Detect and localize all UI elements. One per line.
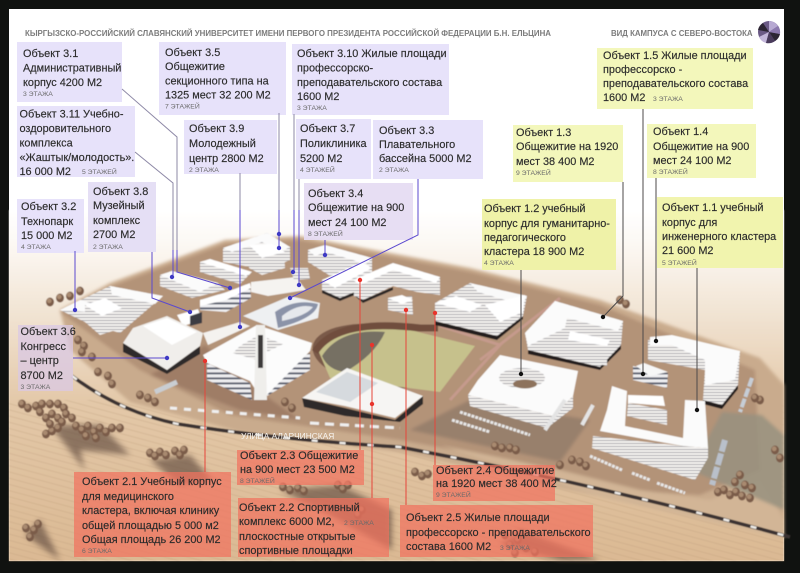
label: object 3.1 bbox=[23, 48, 121, 98]
label: object 1.5 bbox=[603, 50, 749, 104]
stadium bbox=[308, 316, 456, 396]
leader lines: group 3 purple bbox=[73, 179, 418, 358]
label: object 2.4: Объект 2.4 Общежитие bbox=[436, 465, 554, 477]
label: object 1.2 bbox=[484, 203, 610, 267]
label: object 1.2: корпус для гуманитарно- bbox=[484, 218, 610, 230]
label: object 1.1 bbox=[662, 202, 777, 267]
label: object 3.9: 2 ЭТАЖА bbox=[189, 167, 219, 174]
label: object 3.2: Технопарк bbox=[21, 216, 73, 228]
label: object 1.5: профессорско - bbox=[603, 64, 683, 76]
label: object 3.6 bbox=[20, 326, 76, 391]
label: object 3.10 bbox=[297, 48, 447, 112]
label: object 2.3: на 900 мест 23 500 М2 bbox=[240, 464, 355, 476]
label: object 1.1: инженерного кластера bbox=[662, 231, 777, 243]
label: object 3.6: Объект 3.6 bbox=[20, 326, 76, 338]
label: object 3.6: 3 ЭТАЖА bbox=[20, 384, 51, 391]
label: object 3.3: 2 ЭТАЖА bbox=[379, 167, 409, 174]
label: object 2.4 bbox=[436, 465, 557, 499]
label: object 1.5: 1600 М2 bbox=[603, 92, 645, 104]
label: object 3.11: 16 000 М2 bbox=[20, 166, 71, 178]
label: object 2.1: Общая площадь 26 200 М2 bbox=[82, 534, 221, 546]
label: object 1.3 bbox=[516, 127, 618, 177]
black anchor dots bbox=[519, 315, 699, 412]
label: object 3.11: комплекса bbox=[20, 138, 74, 150]
label: object 3.3 bbox=[379, 125, 472, 174]
label: object 3.10: 3 ЭТАЖА bbox=[297, 105, 327, 112]
label: object 2.3: Объект 2.3 Общежитие bbox=[240, 450, 358, 462]
view caption: ВИД КАМПУСА С СЕВЕРО-ВОСТОКА bbox=[611, 29, 753, 38]
label: object 3.7: Объект 3.7 bbox=[300, 123, 355, 135]
label: object 2.5: Объект 2.5 Жилые площади bbox=[406, 512, 550, 524]
label: object 3.10: Объект 3.10 Жилые площади bbox=[297, 48, 447, 60]
label: object 3.4 bbox=[308, 188, 404, 238]
label: object 1.4: Общежитие на 900 bbox=[653, 141, 749, 153]
label: object 3.4: Общежитие на 900 bbox=[308, 202, 404, 214]
label: object 3.7: Поликлиника bbox=[300, 138, 368, 150]
label: object 3.1: Административный bbox=[23, 63, 121, 75]
label: object 3.7 bbox=[300, 123, 368, 174]
label: object 1.4: мест 24 100 М2 bbox=[653, 155, 731, 167]
label: object 3.6: 8700 М2 bbox=[20, 370, 63, 382]
building 1.2 ring bbox=[468, 355, 578, 428]
label: object 1.2: педагогического bbox=[484, 232, 566, 244]
label: object 1.3: мест 38 400 М2 bbox=[516, 156, 594, 168]
label: object 3.4: 8 ЭТАЖЕЙ bbox=[308, 229, 343, 238]
label: object 2.1: кластера, включая клинику bbox=[82, 505, 220, 517]
label: object 3.1: корпус 4200 М2 bbox=[23, 77, 102, 89]
label: object 2.2: 2 ЭТАЖА bbox=[344, 520, 374, 527]
icon: compass logo bbox=[758, 21, 780, 43]
label: object 1.1: 5 ЭТАЖЕЙ bbox=[662, 258, 697, 267]
label: object 1.1: 21 600 М2 bbox=[662, 245, 713, 257]
label: object 2.2: плоскостные открытые bbox=[239, 531, 356, 543]
label: object 1.3: 9 ЭТАЖЕЙ bbox=[516, 168, 551, 177]
label: object 3.5: Общежитие bbox=[165, 61, 225, 73]
building 1.3 bbox=[525, 301, 623, 370]
label: object 3.11: 5 ЭТАЖЕЙ bbox=[82, 167, 117, 176]
label: object 2.5: профессорско - преподавательского bbox=[406, 527, 591, 539]
label: object 1.2: кластера 18 900 М2 bbox=[484, 246, 584, 258]
label: object 2.2 bbox=[239, 502, 374, 557]
label: object 1.5: преподавательского состава bbox=[603, 78, 749, 90]
label: object 3.9: центр 2800 М2 bbox=[189, 153, 264, 165]
left cluster buildings bbox=[60, 286, 202, 335]
central teaching block 2.1 bbox=[203, 325, 312, 400]
label: object 3.10: 1600 М2 bbox=[297, 91, 339, 103]
label: object 2.1: общей площадью 5 000 м2 bbox=[82, 520, 219, 532]
label: object 1.2: Объект 1.2 учебный bbox=[484, 203, 586, 215]
label: object 2.1: для медицинского bbox=[82, 491, 174, 503]
label: object 3.8 bbox=[93, 186, 148, 251]
label: object 3.10: профессорско- bbox=[297, 62, 374, 74]
label: object 3.9: Молодежный bbox=[189, 138, 256, 150]
label: object 2.4: на 1920 мест 38 400 М2 bbox=[436, 478, 557, 490]
label: object 3.7: 5200 М2 bbox=[300, 153, 342, 165]
label: object 3.2 bbox=[21, 201, 76, 251]
label: object 3.5: 1325 мест 32 200 М2 bbox=[165, 90, 271, 102]
label: object 3.8: 2 ЭТАЖА bbox=[93, 244, 123, 251]
label: object 2.5: состава 1600 М2 bbox=[406, 541, 491, 553]
building 1.1 bbox=[592, 386, 708, 480]
curved pool building bbox=[243, 296, 320, 330]
label: object 1.3: Общежитие на 1920 bbox=[516, 141, 618, 153]
label: object 1.5: Объект 1.5 Жилые площади bbox=[603, 50, 747, 62]
label: object 3.8: Объект 3.8 bbox=[93, 186, 148, 198]
label: object 2.5 bbox=[406, 512, 591, 553]
label: object 3.3: Объект 3.3 bbox=[379, 125, 434, 137]
page header title: КЫРГЫЗСКО-РОССИЙСКИЙ СЛАВЯНСКИЙ УНИВЕРСИТЕТ ИМЕНИ ПЕРВОГО ПРЕЗИДЕНТА РОССИЙСКОЙ ФЕДЕРАЦИИ Б.Н. ЕЛЬЦИНА bbox=[25, 29, 551, 38]
label: object 1.4: Объект 1.4 bbox=[653, 126, 708, 138]
road bbox=[72, 376, 790, 537]
tree shadows bbox=[25, 425, 600, 560]
label: object 2.5: 3 ЭТАЖА bbox=[500, 545, 530, 552]
label: object 3.5: 7 ЭТАЖЕЙ bbox=[165, 102, 200, 110]
sports complex 2.2 bbox=[302, 368, 423, 422]
label: object 3.9 bbox=[189, 123, 264, 174]
label: object 1.3: Объект 1.3 bbox=[516, 127, 571, 139]
sand ground bbox=[9, 210, 784, 561]
purple anchor dots bbox=[73, 232, 327, 360]
label: object 3.7: 4 ЭТАЖЕЙ bbox=[300, 165, 335, 174]
label: object 3.9: Объект 3.9 bbox=[189, 123, 244, 135]
label: object 3.1: 3 ЭТАЖА bbox=[23, 91, 53, 98]
parked cars rows bbox=[155, 378, 752, 493]
label: object 1.5: 3 ЭТАЖА bbox=[653, 96, 683, 103]
label: object 3.2: Объект 3.2 bbox=[21, 201, 76, 213]
label: object 3.2: 15 000 М2 bbox=[21, 230, 72, 242]
building 1.5 bbox=[633, 363, 668, 388]
label: object 3.2: 4 ЭТАЖА bbox=[21, 244, 51, 251]
street name: УЛИЦА АЛАРЧИНСКАЯ bbox=[241, 431, 334, 441]
label: object 1.1: Объект 1.1 учебный bbox=[662, 202, 764, 214]
label: object 2.4: 9 ЭТАЖЕЙ bbox=[436, 490, 471, 499]
campus pavement base bbox=[60, 236, 784, 538]
label: object 3.5: секционного типа на bbox=[165, 76, 270, 88]
label: object 3.6: – центр bbox=[20, 355, 59, 367]
label: object 2.1 bbox=[82, 476, 222, 555]
north row buildings bbox=[353, 263, 527, 340]
label: object 2.2: спортивные площадки bbox=[239, 545, 353, 557]
tree clusters bbox=[18, 286, 784, 558]
label: object 2.3: 8 ЭТАЖЕЙ bbox=[240, 476, 275, 485]
label: object 2.1: 6 ЭТАЖА bbox=[82, 548, 112, 555]
label: object 3.5 bbox=[165, 47, 271, 110]
campus aerial scene bbox=[9, 210, 790, 561]
label: object 3.6: Конгресс bbox=[20, 341, 66, 353]
label: object 3.8: комплекс bbox=[93, 215, 141, 227]
label: object 2.3 bbox=[240, 450, 358, 485]
label: object 2.2: комплекс 6000 М2, bbox=[239, 516, 335, 528]
label: object 3.8: 2700 М2 bbox=[93, 229, 135, 241]
red anchor dots bbox=[203, 278, 437, 406]
label: object 3.11 bbox=[20, 108, 134, 178]
label: object 3.3: бассейна 5000 М2 bbox=[379, 153, 472, 165]
label: object 3.11: «Жаштык/молодость». bbox=[20, 152, 134, 164]
leader lines: group 1 black bbox=[521, 109, 697, 410]
label: object 1.1: корпус для bbox=[662, 217, 717, 229]
label: object 1.4: 8 ЭТАЖЕЙ bbox=[653, 167, 688, 176]
label: object 3.11: Объект 3.11 Учебно- bbox=[20, 108, 124, 120]
label: object 3.4: мест 24 100 М2 bbox=[308, 217, 386, 229]
label: object 3.8: Музейный bbox=[93, 200, 145, 212]
leader lines: group 3 bbox=[122, 89, 299, 260]
label: object 3.11: оздоровительного bbox=[20, 123, 111, 135]
label: object 3.1: Объект 3.1 bbox=[23, 48, 78, 60]
label: object 3.4: Объект 3.4 bbox=[308, 188, 363, 200]
label: object 1.4 bbox=[653, 126, 749, 176]
leader lines: group 2 red bbox=[205, 280, 435, 505]
label: object 2.1: Объект 2.1 Учебный корпус bbox=[82, 476, 222, 488]
upper campus buildings bbox=[160, 233, 372, 312]
congress centre bbox=[123, 316, 250, 374]
label: object 3.3: Плавательного bbox=[379, 139, 455, 151]
label: object 1.2: 4 ЭТАЖА bbox=[484, 260, 514, 267]
building 1.4 bbox=[648, 335, 740, 409]
label: object 2.2: Объект 2.2 Спортивный bbox=[239, 502, 360, 514]
label: object 3.10: преподавательского состава bbox=[297, 77, 443, 89]
label: object 3.5: Объект 3.5 bbox=[165, 47, 220, 59]
